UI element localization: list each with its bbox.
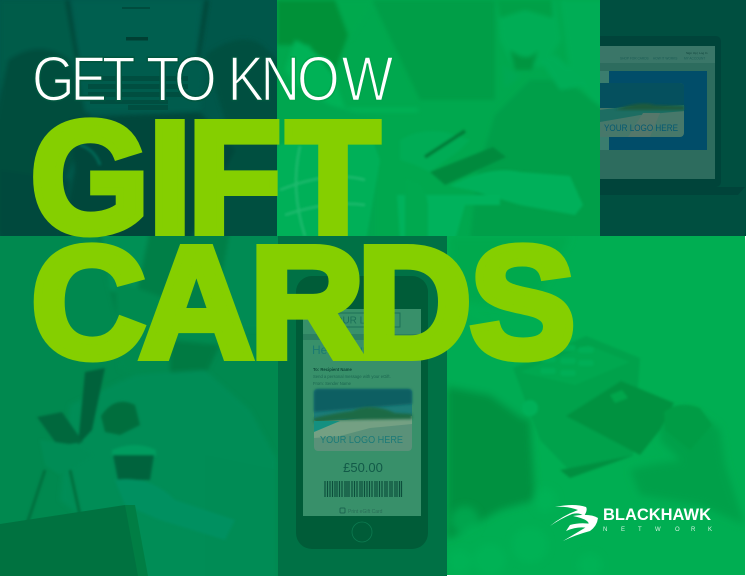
gift card on phone: YOUR LOGO HERE <box>320 435 403 446</box>
message text: Send a personal message with your eGift. <box>313 374 391 379</box>
panel: card payment terminal photo <box>440 236 746 576</box>
panel: phone with eGift card <box>278 236 447 576</box>
panel: laptop photo <box>0 0 290 240</box>
logo: blackhawk network <box>550 505 712 541</box>
panel: laptop with gift card screen: HOW IT WORKS <box>653 56 677 60</box>
print link: Print eGift Card <box>348 509 383 515</box>
amount: £50.00 <box>343 460 383 475</box>
heading: cards: CARDS <box>31 214 575 391</box>
gift card on phone <box>314 389 412 451</box>
logo: blackhawk network: NETWORK <box>603 527 712 533</box>
heading: get to know: GET TO KNOW <box>32 44 393 114</box>
panel: phone with eGift card: Hello Your Name <box>312 343 402 357</box>
panel: man with payment terminal photo <box>270 0 605 240</box>
message text: From: Sender Name <box>313 381 352 386</box>
message text: To: Recipient Name <box>313 367 352 372</box>
logo text: BLACKHAWK <box>603 506 711 524</box>
panel: laptop with gift card screen <box>600 0 746 236</box>
barcode <box>325 481 402 497</box>
message text <box>313 367 391 386</box>
panel: phone with eGift card: YOUR LOGO <box>328 316 389 326</box>
panel: laptop with gift card screen: SHOP FOR CARDS <box>620 56 649 60</box>
icon: hawk swooshes <box>550 505 598 541</box>
heading: gift: GIFT <box>31 88 380 266</box>
panel: woman with phone and coffee photo <box>0 230 285 576</box>
gift card on laptop: YOUR LOGO HERE <box>604 123 678 134</box>
panel: laptop with gift card screen: MY ACCOUNT <box>684 56 705 60</box>
panel: laptop with gift card screen: Sign Up | Log In <box>686 51 708 55</box>
gift card on laptop <box>590 83 684 137</box>
